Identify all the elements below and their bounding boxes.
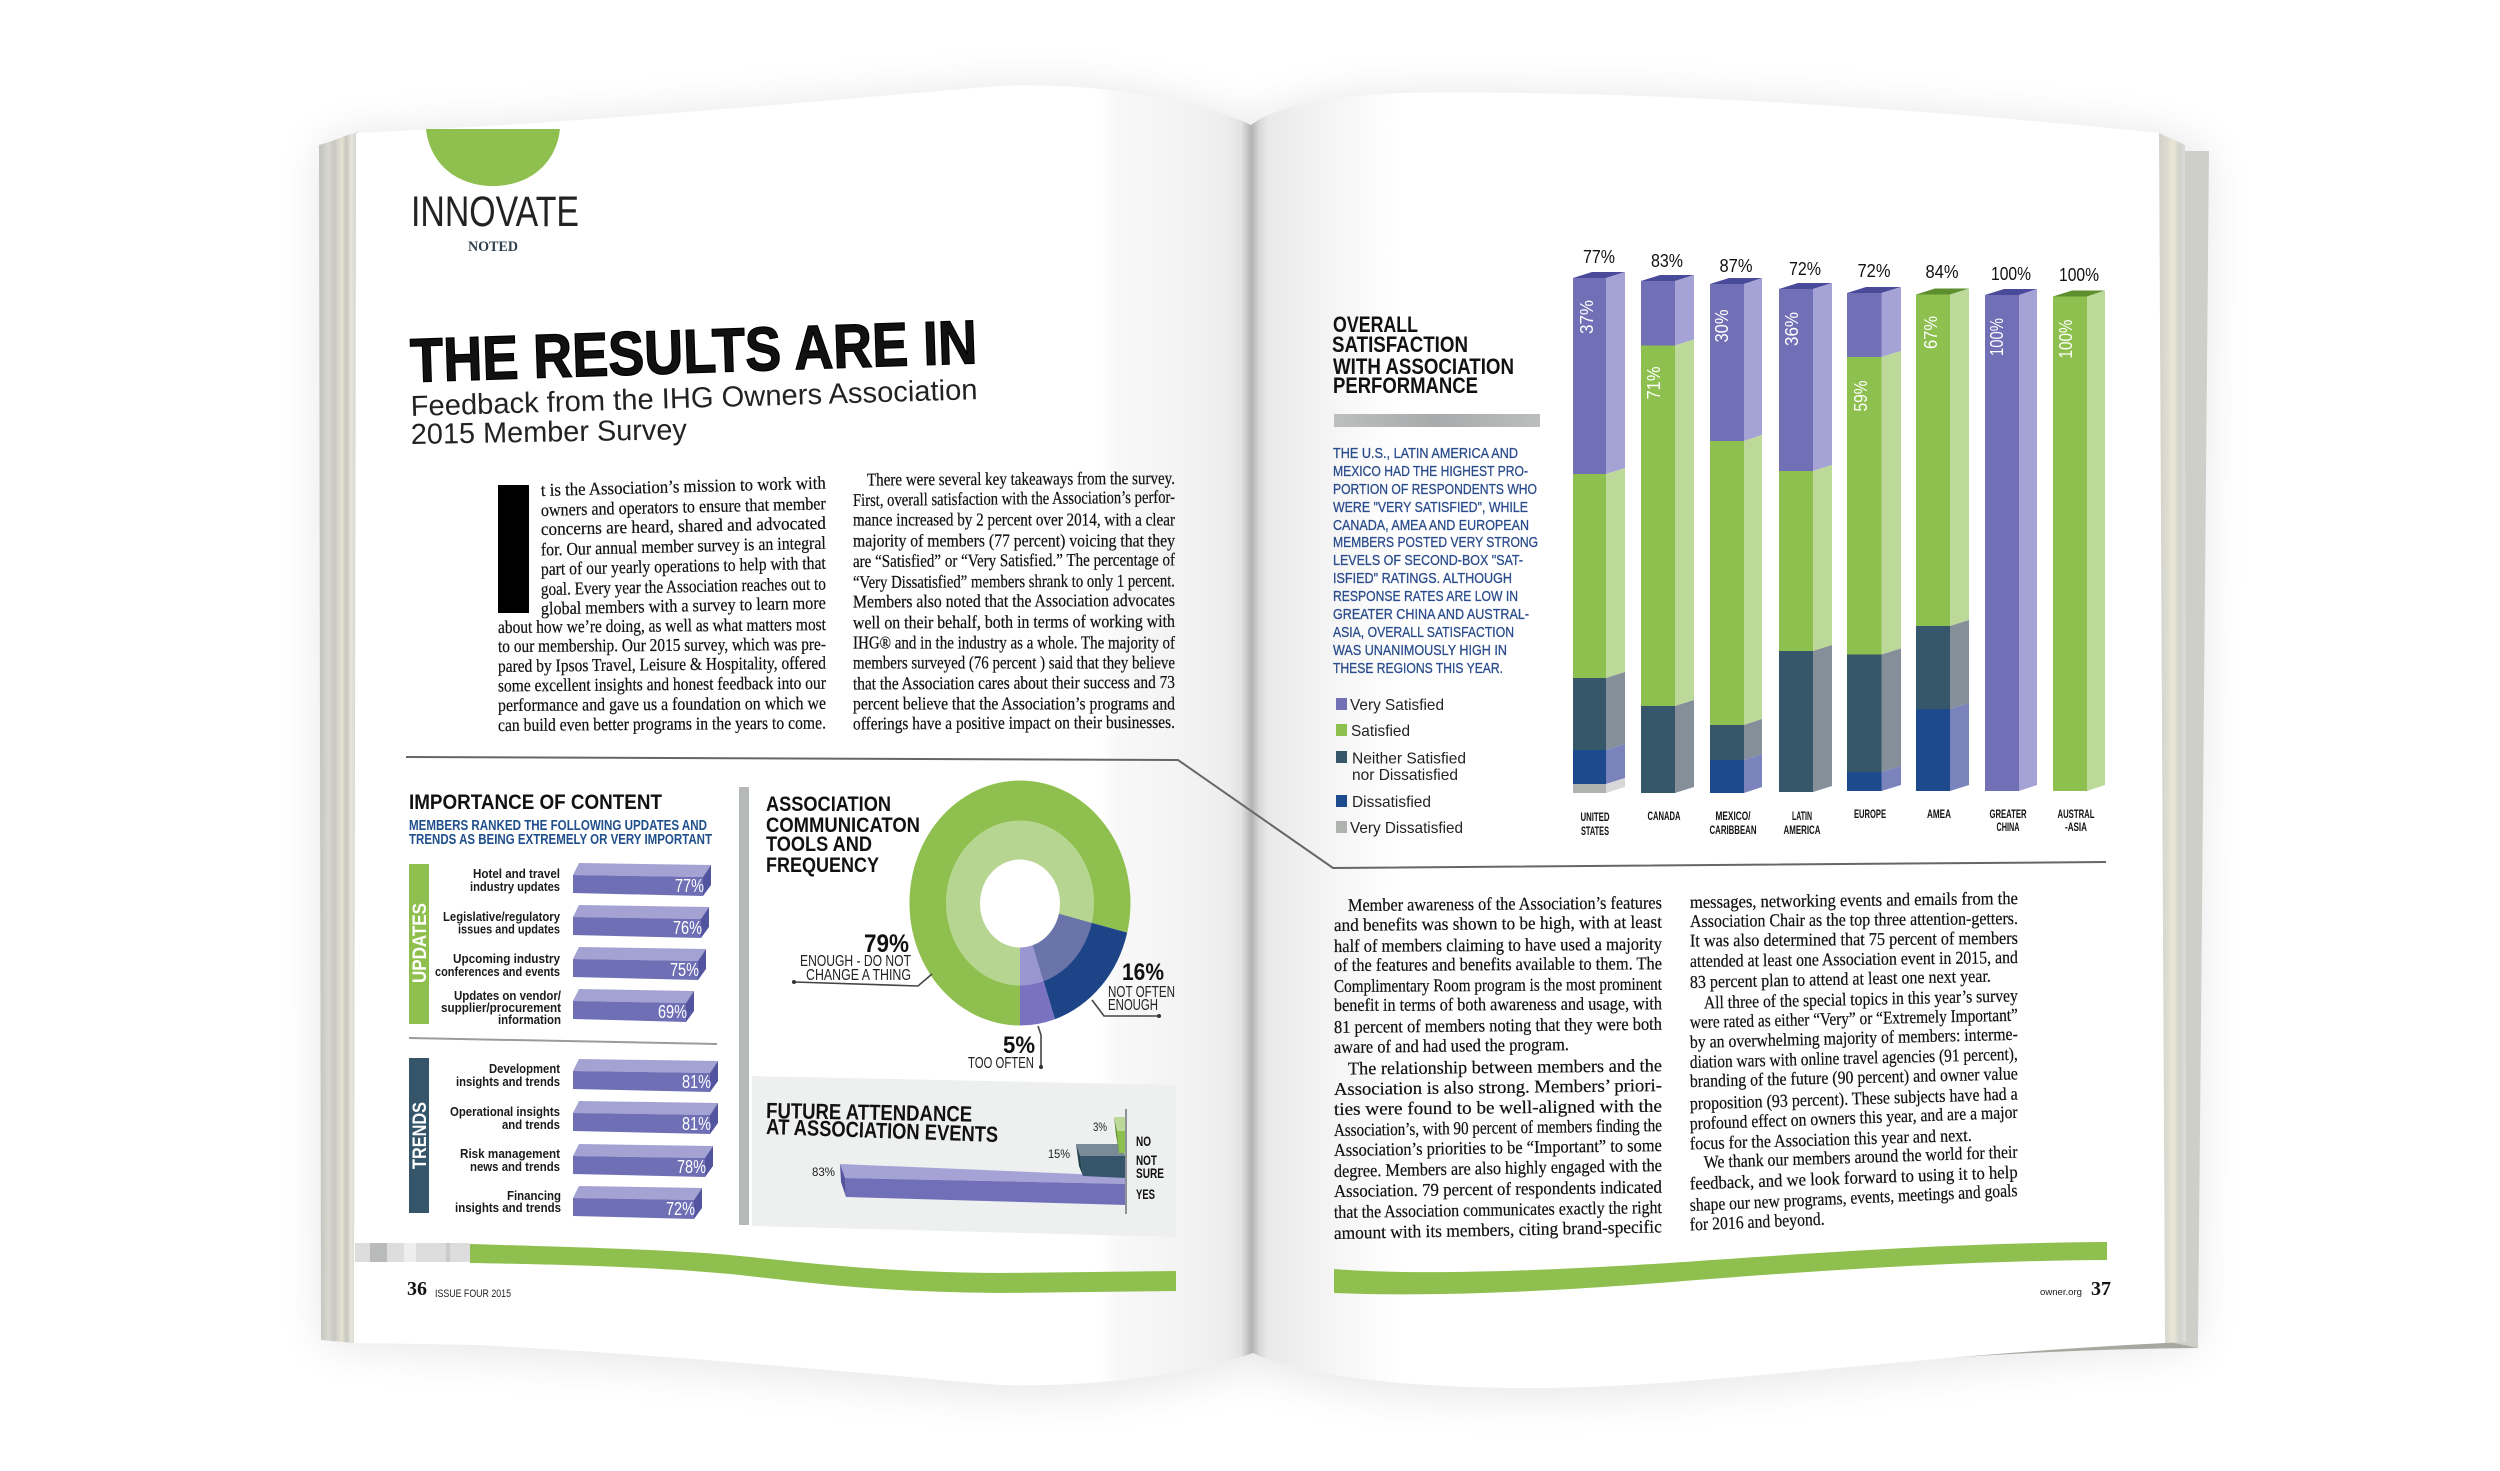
body text: right page column two: Association Chair as the top three attention-getters. [1690,908,2018,931]
body text: left page column two: Members also noted that the Association advocates [853,590,1175,611]
drop cap [498,485,529,613]
body text: left page column one: part of our yearly operations to help with that [541,553,826,579]
heading: association communication tools: ASSOCIATION [766,793,891,816]
row: hotel and travel 77%: 77% [675,876,704,896]
description text: GREATER CHINA AND AUSTRAL- [1333,606,1529,623]
row: vendor updates 69%: 69% [658,1002,687,1022]
bar: greater china: 100% [1987,318,2007,356]
subheading: TRENDS AS BEING EXTREMELY OR VERY IMPORTANT [409,832,712,848]
callout: 79% enough: ENOUGH - DO NOT [800,953,911,970]
row: development 81%: Development [489,1061,561,1076]
group tag: updates [409,864,431,1024]
bar: not sure 15% [1048,1144,1126,1178]
body text: right page column two: attended at least one Association event in 2015, and [1690,947,2018,971]
body text: right page column one: and benefits was shown to be high, with at least [1334,912,1662,935]
group tag: trends: TRENDS [410,1102,431,1169]
section title: innovate: INNOVATE [411,188,579,236]
row: legislative 76%: 76% [673,918,702,938]
callout: 16% not often enough [1092,959,1175,1018]
body text: right page column two: We thank our members around the world for their [1703,1142,2018,1172]
description text: WAS UNANIMOUSLY HIGH IN [1333,642,1507,659]
bar: austral-asia: AUSTRAL [2058,807,2094,821]
row: hotel and travel 77%: industry updates [470,879,560,894]
subsection label: noted: NOTED [468,239,518,255]
body text: right page column one: benefit in terms of both awareness and usage, with [1334,993,1662,1015]
bar: austral-asia: 100% [2056,320,2076,358]
bar: austral-asia: 100% [2059,265,2099,285]
subtitle: Feedback from the IHG Owners Association [410,374,978,423]
bar: latin america: AMERICA [1784,823,1821,837]
axis labels: NOT [1136,1152,1157,1168]
heading: overall satisfaction: PERFORMANCE [1333,373,1478,398]
row: risk management 78%: Risk management [460,1146,561,1161]
body text: left page column two: There were several key takeaways from the survey. [867,468,1175,489]
body text: right page column one: 81 percent of members noting that they were both [1334,1014,1662,1037]
bar: united states: 37% [1577,300,1597,334]
body text: left page column one: global members with a survey to learn more [541,593,826,618]
body text: right page column one: Complimentary Room program is the most prominent [1334,974,1662,996]
row: development 81%: 81% [682,1072,711,1092]
description text: RESPONSE RATES ARE LOW IN [1333,588,1518,605]
subtitle [410,374,978,451]
bar: united states: 77% [1583,247,1615,267]
callout: 79% enough: 79% [864,930,909,958]
legend: Very Dissatisfied [1350,820,1463,837]
row: legislative 76% [443,905,709,938]
bar: latin america [1779,259,1832,837]
callout: 79% enough: CHANGE A THING [806,967,911,984]
body text: right page column two: focus for the Association this year and next. [1690,1125,1972,1153]
donut chart [909,780,1130,1026]
bar: europe: 59% [1851,380,1871,412]
bar: greater china [1985,264,2037,834]
description text: ISFIED" RATINGS. ALTHOUGH [1333,570,1512,587]
bar: amea [1916,262,1969,821]
connecting rule across pages [406,757,2106,868]
panel: importance of content [409,791,718,1219]
bar: mexico caribbean [1710,256,1762,837]
left page edge stack [319,132,358,1343]
row: vendor updates 69% [441,988,694,1027]
body text: left page column two: are “Satisfied” or “Very Satisfied.” The percentage of [853,549,1175,571]
description text: MEMBERS POSTED VERY STRONG [1333,534,1538,551]
group tag: trends [409,1058,431,1213]
bar: united states [1573,247,1625,838]
row: conferences 75%: Upcoming industry [453,951,561,966]
body text: left page column one: goal. Every year the Association reaches out to [541,574,826,599]
footer strip: right page green wave [1334,1242,2107,1294]
bar: amea: AMEA [1927,807,1951,821]
body text: left page column two: offerings have a positive impact on their businesses. [853,712,1175,733]
body text: right page column two: All three of the special topics in this year’s survey [1704,985,2018,1012]
description text: MEXICO HAD THE HIGHEST PRO- [1333,463,1528,480]
row: operational 81%: and trends [502,1117,560,1132]
bar: mexico caribbean: MEXICO/ [1716,809,1751,823]
body text: right page column two: feedback, and we look forward to using it to help [1689,1162,2018,1193]
folio: page 37 [2040,1278,2111,1300]
row: financing 72% [455,1186,702,1219]
body text: right page column one: degree. Members are also highly engaged with the [1334,1155,1662,1181]
description text: PORTION OF RESPONDENTS WHO [1333,481,1537,498]
row: hotel and travel 77%: Hotel and travel [473,866,560,881]
body text: left page column two: “Very Dissatisfied” members shrank to only 1 percent. [853,570,1175,592]
bar: no 3%: 3% [1093,1120,1107,1134]
bar: greater china: 100% [1991,264,2031,284]
bar: no 3% [1093,1117,1126,1153]
body text: left page column one: owners and operators to ensure that member [541,493,826,520]
main title: THE RESULTS ARE IN [409,308,978,396]
heading: overall satisfaction [1332,312,1514,398]
bar: not sure 15%: 15% [1048,1147,1070,1161]
description text: THE U.S., LATIN AMERICA AND [1333,445,1518,462]
callout: 5% too often [968,1026,1043,1072]
subtitle: 2015 Member Survey [411,414,688,451]
body text: left page column one: performance and gave us a foundation on which we [498,693,826,715]
body text: right page column two: by an overwhelming majority of members: interme- [1690,1024,2018,1052]
bar: mexico caribbean: 87% [1720,256,1752,276]
bar: austral-asia: -ASIA [2065,820,2087,834]
body text: right page column one [1334,892,1662,1243]
body text: right page column one: half of members claiming to have used a majority [1334,934,1662,956]
axis labels: NO [1136,1133,1151,1149]
right page edge stack [2159,133,2186,1343]
description text: WERE "VERY SATISFIED", WHILE [1333,499,1528,516]
bar: greater china: CHINA [1996,820,2020,834]
subheading: MEMBERS RANKED THE FOLLOWING UPDATES AND [409,818,707,834]
heading: overall satisfaction: OVERALL [1333,312,1418,337]
bar: mexico caribbean: 30% [1712,310,1732,342]
bar: united states: STATES [1581,824,1609,838]
folio: page 36: ISSUE FOUR 2015 [435,1288,511,1300]
legend: nor Dissatisfied [1352,767,1458,784]
body text: left page column one: about how we’re doing, as well as what matters most [498,614,826,637]
bar: greater china: GREATER [1990,807,2027,821]
description text: THESE REGIONS THIS YEAR. [1333,660,1503,677]
row: vendor updates 69%: supplier/procurement [441,1000,562,1015]
bar: latin america: 36% [1782,312,1802,346]
axis labels: YES [1136,1186,1155,1202]
body text: left page column two: mance increased by 2 percent over 2014, with a clear [853,510,1175,530]
bar: latin america: 72% [1789,259,1821,279]
body text: right page column two: messages, networking events and emails from the [1690,888,2018,912]
body text: right page column two: profound effect on owners this year, and are a major [1689,1102,2018,1133]
body text: right page column one: aware of and had used the program. [1334,1034,1569,1057]
body text: right page column one: of the features and benefits available to them. The [1334,953,1662,975]
folio: page 36: 36 [407,1278,427,1300]
bar: austral-asia [2053,265,2105,834]
bar: europe: 72% [1858,261,1890,281]
description text [1333,445,1538,677]
subheading [409,818,712,848]
callout: 16% not often enough: NOT OFTEN [1108,984,1175,1001]
body text: left page column two: well on their behalf, both in terms of working with [853,611,1175,632]
body text: left page column two: First, overall satisfaction with the Association’s perfor- [853,487,1175,510]
bar: mexico caribbean: CARIBBEAN [1710,823,1756,837]
body text: right page column two: were rated as either “Very” or “Extremely Important” [1690,1005,2018,1032]
row: development 81%: insights and trends [456,1074,560,1089]
body text: right page column one: amount with its members, citing brand-specific [1334,1216,1662,1243]
bar: europe: EUROPE [1854,807,1886,821]
heading: association communication tools: COMMUNICATON [766,814,920,837]
row: risk management 78% [460,1144,713,1177]
heading: future attendance: FUTURE ATTENDANCE [766,1098,972,1127]
body text: left page column one [498,473,826,735]
heading: overall satisfaction: WITH ASSOCIATION [1333,354,1514,379]
body text: right page column one: Association is also strong. Members’ priori- [1334,1075,1662,1099]
bar: canada: 71% [1644,366,1664,400]
callout: 16% not often enough: ENOUGH [1108,997,1158,1014]
heading: overall satisfaction: SATISFACTION [1332,332,1468,357]
bar: latin america: LATIN [1792,809,1812,823]
bar: canada [1641,251,1694,823]
heading: importance of content: IMPORTANCE OF CONTENT [409,791,662,814]
bar: yes 83% [812,1164,1126,1205]
body text: right page column two: for 2016 and beyond. [1689,1209,1825,1234]
heading: future attendance: AT ASSOCIATION EVENTS [766,1114,999,1147]
body text: left page column two: members surveyed (76 percent ) said that they believe [853,652,1175,674]
row: financing 72%: insights and trends [455,1200,561,1215]
body text: right page column two: shape our new programs, events, meetings and goals [1689,1180,2018,1215]
bar: amea: 84% [1926,262,1958,282]
bar: amea: 67% [1921,316,1941,349]
row: conferences 75% [435,947,706,980]
body text: right page column two: proposition (93 percent). These subjects have had a [1690,1083,2018,1114]
body text: right page column one: The relationship between members and the [1348,1055,1662,1078]
bar: yes 83%: 83% [812,1165,835,1179]
footer strip: left page gray blocks [355,1243,470,1262]
callout: 16% not often enough: 16% [1122,959,1164,986]
bar: canada: 83% [1651,251,1683,271]
body text: right page column one: ties were found to be well-aligned with the [1334,1096,1662,1119]
body text: left page column one: pared by Ipsos Travel, Leisure & Hospitality, offered [498,653,826,676]
body text: right page column one: that the Association communicates exactly the right [1334,1197,1662,1222]
row: vendor updates 69%: information [498,1012,561,1027]
body text: left page column two: that the Association cares about their success and 73 [853,672,1175,693]
body text: right page column two: It was also determined that 75 percent of members [1690,928,2018,950]
body text: left page column one: some excellent insights and honest feedback into our [498,673,826,695]
row: legislative 76%: Legislative/regulatory [443,909,561,924]
body text: right page column two: branding of the future (90 percent) and owner value [1690,1063,2018,1092]
body text: right page column one: Association’s, with 90 percent of members finding the [1334,1115,1662,1140]
bar: united states: UNITED [1580,810,1610,824]
footer strip: left page green wave [470,1244,1176,1293]
row: operational 81% [450,1101,718,1134]
callout: 5% too often: 5% [1003,1032,1035,1059]
legend: Neither Satisfied [1352,750,1466,768]
axis labels [1136,1133,1164,1202]
legend [1336,697,1466,837]
legend: Very Satisfied [1350,697,1444,714]
folio: page 36 [407,1278,511,1300]
body text: left page column two [853,468,1175,733]
row: conferences 75%: 75% [670,960,699,980]
open book pages [354,60,2165,1410]
heading: future attendance [766,1098,999,1147]
body text: right page column two: diation wars with online travel agencies (91 percent), [1690,1044,2018,1073]
body text: left page column one: concerns are heard, shared and advocated [541,513,826,539]
heading: association communication tools [766,793,920,877]
legend: Satisfied [1351,723,1410,740]
body text: left page column two: IHG® and in the industry as a whole. The majority of [853,632,1175,652]
description text: ASIA, OVERALL SATISFACTION [1333,624,1514,641]
group tag: updates: UPDATES [410,903,431,983]
panel: communication frequency donut [766,780,1175,1072]
description text: CANADA, AMEA AND EUROPEAN [1333,517,1529,534]
folio: page 37: 37 [2091,1278,2111,1300]
body text: right page column two: 83 percent plan to attend at least one next year. [1690,966,1991,992]
body text: right page column two [1689,888,2018,1234]
legend: Dissatisfied [1352,794,1431,811]
callout: 79% enough [792,930,932,986]
body text: left page column two: percent believe that the Association’s programs and [853,694,1175,714]
heading: association communication tools: TOOLS AND [766,833,872,856]
body text: left page column one: t is the Association’s mission to work with [541,473,826,500]
body text: right page column one: Association. 79 percent of respondents indicated [1334,1177,1662,1201]
bar: canada: CANADA [1648,809,1681,823]
row: hotel and travel 77% [470,863,711,896]
row: development 81% [456,1059,718,1092]
page drop shadow [319,85,2209,1398]
description text: LEVELS OF SECOND-BOX "SAT- [1333,552,1523,569]
row: operational 81%: Operational insights [450,1104,560,1119]
heading: association communication tools: FREQUENCY [766,854,879,877]
body text: right page column one: Member awareness of the Association’s features [1348,892,1662,915]
body text: left page column one: can build even better programs in the years to come. [498,712,826,735]
body text: left page column one: for. Our annual member survey is an integral [541,533,826,559]
section tab: green half circle [426,129,560,186]
row: conferences 75%: conferences and events [435,964,560,979]
callout: 5% too often: TOO OFTEN [968,1055,1034,1072]
row: vendor updates 69%: Updates on vendor/ [454,988,561,1003]
row: financing 72%: Financing [507,1188,561,1203]
panel divider bar [739,787,749,1225]
body text: right page column one: Association’s priorities to be “Important” to some [1334,1135,1662,1160]
row: operational 81%: 81% [682,1114,711,1134]
panel: future attendance [752,1076,1176,1237]
panel: overall satisfaction [1332,247,2105,838]
right cover edge [1800,151,2209,1371]
bar: europe [1847,261,1901,821]
row: risk management 78%: 78% [677,1157,706,1177]
row: legislative 76%: issues and updates [458,922,560,936]
row: financing 72%: 72% [666,1199,695,1219]
body text: left page column one: to our membership. Our 2015 survey, which was pre- [498,634,826,656]
axis labels: SURE [1136,1165,1164,1181]
folio: page 37: owner.org [2040,1287,2082,1297]
row: risk management 78%: news and trends [470,1159,560,1174]
body text: left page column two: majority of members (77 percent) voicing that they [853,530,1175,552]
